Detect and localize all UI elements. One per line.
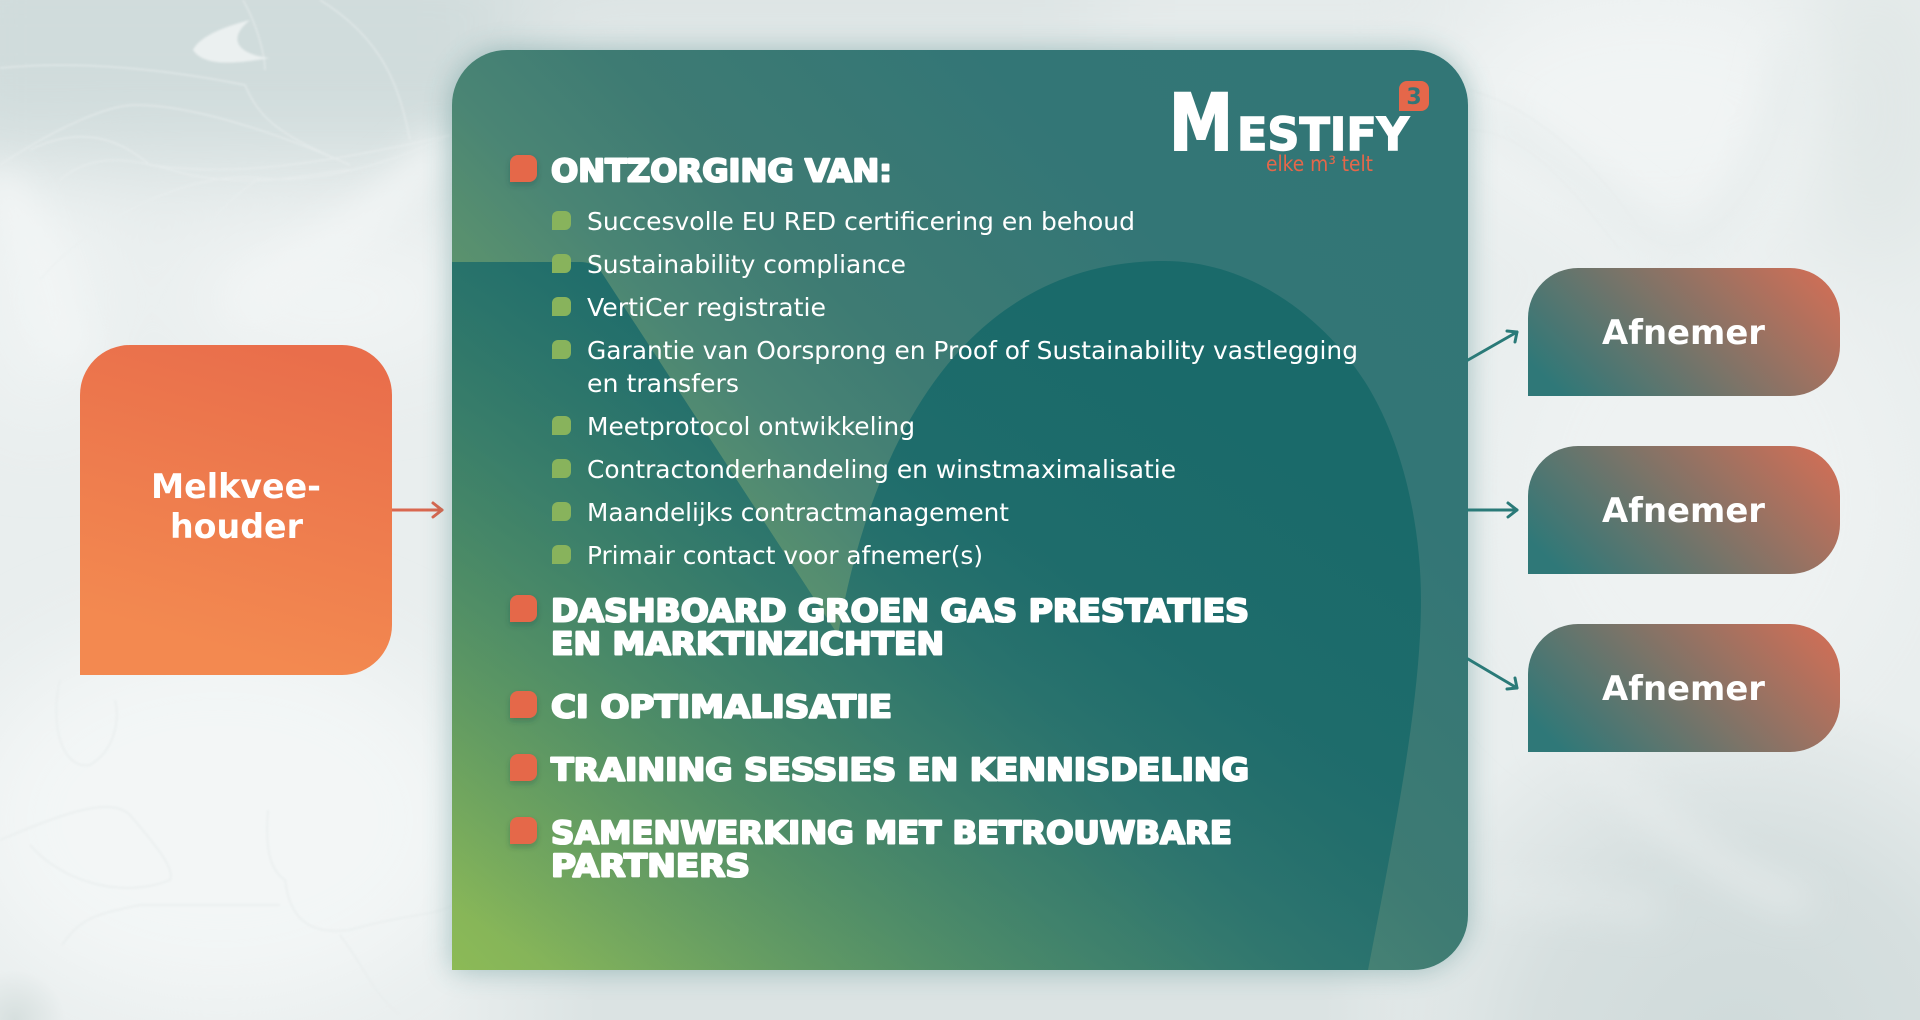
list: ontzorging items: Maandelijks contractmanagement — [587, 498, 1009, 527]
arrow: platform to afnemer middle — [1468, 503, 1517, 517]
section: training: TRAINING SESSIES EN KENNISDELING — [551, 752, 1249, 788]
logo: mestify — [1169, 79, 1429, 176]
panel: afnemer top — [1528, 268, 1840, 396]
section: dashboard — [510, 594, 1249, 662]
section: dashboard: EN MARKTINZICHTEN — [551, 626, 944, 662]
list: ontzorging items: Garantie van Oorsprong en Proof of Sustainability vastlegging — [587, 336, 1358, 365]
section: ontzorging van — [510, 154, 1358, 570]
list: ontzorging items: Primair contact voor afnemer(s) — [587, 541, 983, 570]
list: ontzorging items: Contractonderhandeling en winstmaximalisatie — [587, 455, 1176, 484]
panel: melkveehouder — [80, 345, 392, 675]
section: ci optimalisatie: CI OPTIMALISATIE — [551, 690, 892, 726]
soft smoke bands — [0, 60, 1800, 910]
arrow: platform to afnemer top — [1468, 331, 1517, 360]
label: melkveehouder: houder — [170, 507, 303, 547]
list: ontzorging items: VertiCer registratie — [587, 293, 826, 322]
logo badge: 3 — [1399, 81, 1429, 111]
arrow: platform to afnemer bottom — [1468, 659, 1517, 689]
panel: afnemer bottom — [1528, 624, 1840, 752]
panel: afnemer middle — [1528, 446, 1840, 574]
arrow: melkveehouder to platform — [392, 503, 442, 517]
section: dashboard: DASHBOARD GROEN GAS PRESTATIES — [551, 594, 1249, 630]
section: samenwerking: SAMENWERKING MET BETROUWBARE — [551, 816, 1232, 852]
panel: afnemer middle: Afnemer — [1602, 491, 1765, 531]
panel shadow — [452, 50, 1468, 970]
logo: mestify: M — [1169, 79, 1233, 169]
logo: mestify: ESTIFY — [1237, 108, 1410, 161]
list: ontzorging items: en transfers — [587, 369, 739, 398]
bullet: heading — [510, 155, 537, 182]
panel: afnemer top: Afnemer — [1602, 313, 1765, 353]
watermark shape — [452, 261, 1421, 970]
section: samenwerking: PARTNERS — [551, 848, 750, 884]
logo tagline: elke m³ telt — [1266, 152, 1373, 176]
label: melkveehouder: Melkvee- — [151, 467, 321, 507]
list: ontzorging items: Meetprotocol ontwikkeling — [587, 412, 915, 441]
label: melkveehouder — [151, 467, 321, 547]
logo badge: 3: 3 — [1406, 85, 1422, 110]
section: samenwerking — [510, 816, 1232, 884]
panel: mestify services — [452, 50, 1468, 970]
panel: afnemer bottom: Afnemer — [1602, 669, 1765, 709]
list: ontzorging items — [552, 207, 1358, 570]
heading: ontzorging van: ONTZORGING VAN: — [551, 154, 892, 190]
list: ontzorging items: Sustainability compliance — [587, 250, 906, 279]
list: ontzorging items: Succesvolle EU RED certificering en behoud — [587, 207, 1135, 236]
